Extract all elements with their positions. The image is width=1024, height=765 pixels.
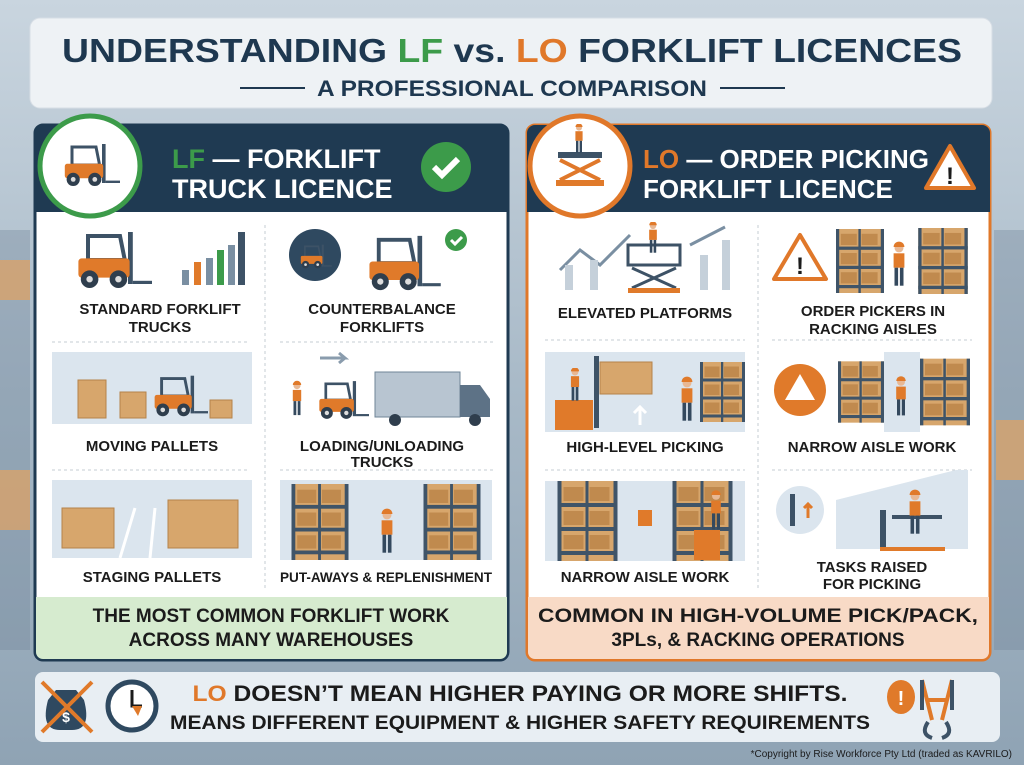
LF footer band <box>36 597 507 659</box>
cell: narrow aisle work (right): NARROW AISLE WORK <box>788 439 956 456</box>
LO footer band: COMMON IN HIGH-VOLUME PICK/PACK, <box>538 606 978 627</box>
LF footer band: ACROSS MANY WAREHOUSES <box>129 630 413 651</box>
LO header: ! <box>946 163 954 190</box>
cell: counterbalance forklifts: FORKLIFTS <box>340 319 424 336</box>
LO footer band <box>528 597 989 659</box>
icon: money bag crossed: $ <box>62 709 70 725</box>
cell: elevated platforms: ELEVATED PLATFORMS <box>558 305 732 322</box>
icon: money bag crossed <box>42 682 92 732</box>
copyright: *Copyright by Rise Workforce Pty Ltd (traded as KAVRILO) <box>751 749 1012 760</box>
cell: staging pallets <box>52 480 252 586</box>
bottom banner <box>35 672 1000 742</box>
cell: loading/unloading trucks: TRUCKS <box>351 454 413 471</box>
title: UNDERSTANDING LF vs. LO FORKLIFT LICENCES <box>62 32 962 69</box>
cell: tasks raised for picking: FOR PICKING <box>823 576 921 593</box>
cell: elevated platforms <box>558 221 732 322</box>
LF header: TRUCK LICENCE <box>172 174 392 204</box>
cell: standard forklift trucks: TRUCKS <box>129 319 191 336</box>
cell: counterbalance forklifts: COUNTERBALANCE <box>308 301 456 318</box>
bottom message <box>170 681 870 734</box>
panel: LO <box>527 116 990 660</box>
cell: narrow aisle work (left) <box>545 481 745 586</box>
cell: high-level picking: HIGH-LEVEL PICKING <box>566 439 724 456</box>
icon: safety harness <box>922 680 952 738</box>
cell: put-aways <box>280 480 492 585</box>
LO header: FORKLIFT LICENCE <box>643 174 893 204</box>
cell: tasks raised for picking <box>776 470 968 593</box>
icon: clock <box>108 682 156 730</box>
LO footer band: 3PLs, & RACKING OPERATIONS <box>611 630 905 651</box>
cell: tasks raised for picking: TASKS RAISED <box>817 559 927 576</box>
icon: warning <box>887 680 915 714</box>
cell: counterbalance forklifts <box>289 229 467 336</box>
title box <box>30 18 992 108</box>
cell: high-level picking <box>545 352 745 456</box>
LF header <box>35 116 508 216</box>
icon: warning: ! <box>898 688 904 710</box>
cell: standard forklift trucks <box>78 232 245 336</box>
cell: loading/unloading trucks: LOADING/UNLOADING <box>300 438 464 455</box>
cell: order pickers in racking aisles <box>774 228 968 338</box>
cell: order pickers in racking aisles: ORDER PICKERS IN <box>801 303 945 320</box>
cell: staging pallets: STAGING PALLETS <box>83 569 221 586</box>
cell: loading/unloading trucks <box>293 353 490 471</box>
LF footer band: THE MOST COMMON FORKLIFT WORK <box>93 606 450 627</box>
LF header: LF — FORKLIFT <box>172 144 381 174</box>
cell: moving pallets: MOVING PALLETS <box>86 438 218 455</box>
LO header <box>527 116 990 216</box>
bottom message: MEANS DIFFERENT EQUIPMENT & HIGHER SAFETY REQUIREMENTS <box>170 713 870 734</box>
bottom message: LO DOESN’T MEAN HIGHER PAYING OR MORE SHIFTS. <box>192 681 848 706</box>
cell: standard forklift trucks: STANDARD FORKLIFT <box>79 301 241 318</box>
panel: LF <box>35 116 508 660</box>
cell: put-aways: PUT-AWAYS & REPLENISHMENT <box>280 569 492 585</box>
cell: order pickers in racking aisles: RACKING AISLES <box>809 321 937 338</box>
subtitle: A PROFESSIONAL COMPARISON <box>317 76 707 101</box>
cell: order pickers in racking aisles: ! <box>796 253 804 280</box>
cell: narrow aisle work (left): NARROW AISLE WORK <box>561 569 729 586</box>
cell: narrow aisle work (right) <box>774 352 970 456</box>
LO header: LO — ORDER PICKING <box>643 144 929 174</box>
cell: moving pallets <box>52 352 252 455</box>
